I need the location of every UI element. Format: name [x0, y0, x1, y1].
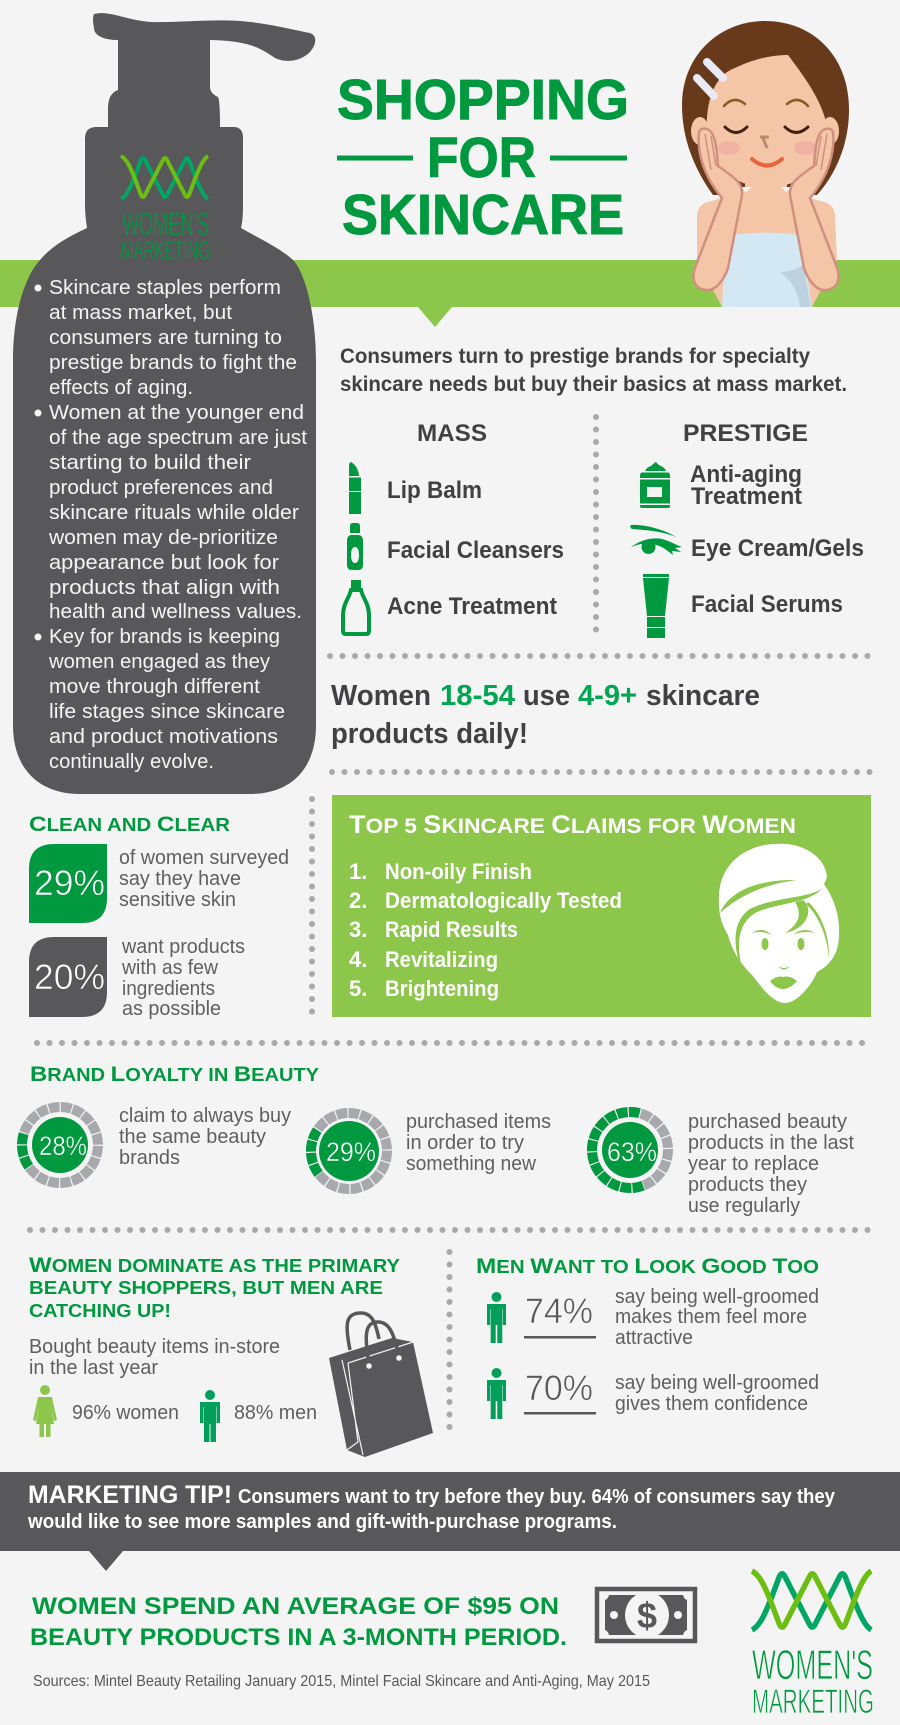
bullet list: skincare rituals while older: [49, 502, 299, 524]
text: same brands: [119, 1105, 291, 1169]
bullet list: Women at the younger end: [49, 402, 304, 424]
claims list: 5.: [349, 976, 367, 1001]
text: attractive: say being well-groomed: [615, 1286, 819, 1308]
text: same brands: claim to always buy: [119, 1105, 291, 1127]
icon: cleanser bottle: [347, 523, 363, 570]
donut: 29%: 29%: [326, 1137, 376, 1167]
panel: prestige column: [630, 420, 864, 638]
stat text: few ingredients: as possible: [122, 998, 221, 1020]
text: attractive: attractive: [615, 1327, 693, 1349]
title: SHOPPING: [337, 68, 629, 132]
claims list: Dermatologically Tested: [385, 888, 622, 913]
statement: daily product use: products daily!: [331, 718, 528, 750]
logo in bottle: [121, 156, 210, 265]
text: try something new: in order to try: [406, 1132, 524, 1154]
claims list: Rapid Results: [385, 917, 518, 942]
claims list: 1.: [349, 859, 367, 884]
panel: mass column: [343, 420, 564, 634]
text: confidence: [615, 1372, 819, 1415]
panel: women dominate shoppers: 96% women: [72, 1402, 179, 1424]
bullet list: of the age spectrum are just: [49, 427, 307, 449]
intro statement: [340, 345, 847, 396]
panel: prestige column: Eye Cream/Gels: [691, 535, 864, 562]
bullet list: life stages since skincare: [49, 701, 285, 723]
panel: mass column: MASS: [417, 420, 487, 447]
icon: woman: [33, 1385, 57, 1437]
heading: BEAUTY SHOPPERS, BUT MEN ARE: [29, 1278, 383, 1298]
icon: eye: [630, 525, 682, 555]
bullet list: appearance but look for: [49, 552, 279, 574]
bullet list: women may de-prioritize: [48, 527, 278, 549]
sources: Sources: Mintel Beauty Retailing January 2015, Mintel Facial Skincare and Anti-Aging, May 2015: [33, 1673, 650, 1690]
panel: clean and clear: CLEAN AND CLEAR: [29, 812, 230, 836]
text: try something new: something new: [406, 1153, 537, 1175]
panel: brand loyalty: [7, 1062, 854, 1217]
icon: acne treatment bottle: [343, 580, 369, 634]
claims list: Non-oily Finish: [385, 859, 532, 884]
icon: dollar bill: $: [637, 1595, 657, 1636]
icon: serum tube: [643, 574, 669, 638]
icon: man 74: [487, 1292, 506, 1343]
panel: men want to look good: MEN WANT TO LOOK GOOD TOO: [476, 1254, 819, 1278]
statement: daily product use: [331, 680, 760, 750]
text: same brands: the same beauty: [119, 1126, 266, 1148]
icon: man: [200, 1390, 220, 1442]
panel: marketing tip: Consumers want to try before they buy. 64% of consumers say they: [238, 1486, 836, 1508]
statement: daily product use: 18-54: [440, 680, 515, 712]
column divider: [593, 417, 599, 630]
icon: cream jar: [640, 462, 670, 508]
claims list: Revitalizing: [385, 947, 498, 972]
panel: top 5 skincare claims: TOP 5 SKINCARE CLAIMS FOR WOMEN: [349, 811, 796, 839]
text: replace products: [688, 1111, 854, 1217]
icon: face with towel: [719, 844, 839, 1003]
claims list: [349, 859, 622, 1001]
statement: daily product use: skincare: [646, 680, 760, 712]
text: attractive: makes them feel more: [615, 1306, 807, 1328]
text: replace products: use regularly: [688, 1195, 800, 1217]
text: replace products: purchased beauty: [688, 1111, 847, 1133]
text: try something new: purchased items: [406, 1111, 551, 1133]
panel: men want to look good: [476, 1254, 819, 1419]
panel: prestige column: Anti-aging: [690, 461, 802, 488]
icon: lipstick: [349, 462, 361, 514]
statement: average spend: WOMEN SPEND AN AVERAGE OF $95 ON: [32, 1593, 559, 1620]
icon: man 70: [487, 1368, 506, 1419]
stat text: few ingredients: with as few: [121, 957, 219, 979]
panel: prestige column: Treatment: [691, 483, 802, 510]
stat: 74%: 74%: [525, 1292, 593, 1331]
text: confidence: gives them confidence: [615, 1393, 808, 1415]
stat text: sensitive skin: sensitive skin: [119, 889, 236, 911]
statement: daily product use: Women: [331, 680, 431, 712]
green header band: [0, 260, 900, 327]
heading: [29, 1253, 400, 1321]
panel: marketing tip: would like to see more samples and gift-with-purchase programs.: [27, 1511, 617, 1533]
stat: 70%: 70%: [525, 1369, 593, 1408]
stat text: few ingredients: ingredients: [122, 978, 215, 1000]
text: try something new: [406, 1111, 551, 1175]
subtext: in the last year: [29, 1357, 158, 1379]
stat card: 20%: 20%: [34, 958, 105, 997]
panel: bottle with key takeaways: [13, 13, 316, 794]
bullet list: consumers are turning to: [49, 327, 282, 349]
subtext: Bought beauty items in-store: [29, 1336, 280, 1358]
bottle silhouette: [13, 13, 316, 794]
text: replace products: products they: [688, 1174, 807, 1196]
stat text: sensitive skin: of women surveyed: [119, 847, 289, 869]
bullet list: at mass market, but: [49, 302, 232, 324]
bullet list: effects of aging.: [49, 377, 193, 399]
statement: daily product use: 4-9+: [578, 680, 637, 712]
logo: women's marketing: [752, 1571, 874, 1721]
stat card: 29%: 29%: [34, 864, 105, 903]
icon: dollar bill: [597, 1589, 695, 1641]
panel: prestige column: PRESTIGE: [683, 420, 808, 447]
heading: CATCHING UP!: [29, 1301, 171, 1321]
text: same brands: brands: [119, 1147, 180, 1169]
panel: clean and clear: [29, 812, 289, 1020]
claims list: 3.: [349, 917, 367, 942]
panel: mass column: Lip Balm: [387, 477, 482, 504]
bullet list: women engaged as they: [48, 651, 270, 673]
title: SKINCARE: [342, 183, 624, 247]
donut: 28%: [7, 1092, 113, 1198]
panel: mass column: Facial Cleansers: [387, 537, 564, 564]
bullet list: health and wellness values.: [49, 601, 302, 623]
intro statement: skincare needs but buy their basics at mass market.: [340, 373, 847, 396]
bullet list: product preferences and: [49, 477, 273, 499]
panel: prestige column: Facial Serums: [691, 591, 843, 618]
stat text: sensitive skin: say they have: [119, 868, 241, 890]
bullet list: continually evolve.: [49, 751, 214, 773]
stat text: sensitive skin: [119, 847, 289, 911]
text: attractive: [615, 1286, 819, 1349]
text: replace products: products in the last: [688, 1132, 854, 1154]
logo in bottle: WOMEN'S: [122, 206, 209, 242]
donut: 28%: 28%: [39, 1131, 87, 1161]
title: FOR: [427, 126, 536, 190]
heading: WOMEN DOMINATE AS THE PRIMARY: [29, 1253, 400, 1277]
donut: 63%: 63%: [607, 1137, 657, 1167]
logo in bottle: MARKETING: [121, 235, 210, 265]
bullet list: move through different: [49, 676, 260, 698]
donut: 63%: [581, 1101, 679, 1199]
donut: 29%: [296, 1098, 402, 1204]
bullet list: [34, 277, 307, 773]
stat text: few ingredients: [121, 936, 245, 1020]
bullet list: and product motivations: [49, 726, 278, 748]
claims list: Brightening: [385, 976, 499, 1001]
panel: marketing tip: MARKETING TIP!: [28, 1481, 232, 1509]
statement: daily product use: use: [523, 680, 570, 712]
title: [337, 68, 629, 247]
panel: top 5 skincare claims: [332, 795, 871, 1017]
panel: marketing tip: [0, 1472, 900, 1571]
stat card: 29%: [29, 844, 107, 923]
text: replace products: year to replace: [688, 1153, 819, 1175]
illustration: woman with towel: [682, 21, 849, 307]
bullet list: Skincare staples perform: [49, 277, 281, 299]
statement: average spend: [30, 1593, 567, 1651]
icon: shopping bag: [329, 1313, 433, 1457]
bullet list: starting to build their: [49, 452, 251, 474]
bullet list: Key for brands is keeping: [49, 626, 280, 648]
text: confidence: say being well-groomed: [615, 1372, 819, 1394]
stat text: few ingredients: want products: [121, 936, 245, 958]
panel: brand loyalty: BRAND LOYALTY IN BEAUTY: [30, 1062, 319, 1086]
bullet list: products that align with: [49, 577, 280, 599]
panel: women dominate shoppers: 88% men: [234, 1402, 317, 1424]
statement: average spend: BEAUTY PRODUCTS IN A 3-MONTH PERIOD.: [30, 1624, 567, 1651]
panel: mass column: Acne Treatment: [387, 593, 557, 620]
subtext: [29, 1336, 280, 1379]
claims list: 2.: [349, 888, 367, 913]
stat card: 20%: [29, 937, 107, 1017]
bullet list: prestige brands to fight the: [49, 352, 297, 374]
claims list: 4.: [349, 947, 367, 972]
intro statement: Consumers turn to prestige brands for specialty: [340, 345, 810, 368]
panel: women dominate shoppers: [29, 1253, 433, 1457]
